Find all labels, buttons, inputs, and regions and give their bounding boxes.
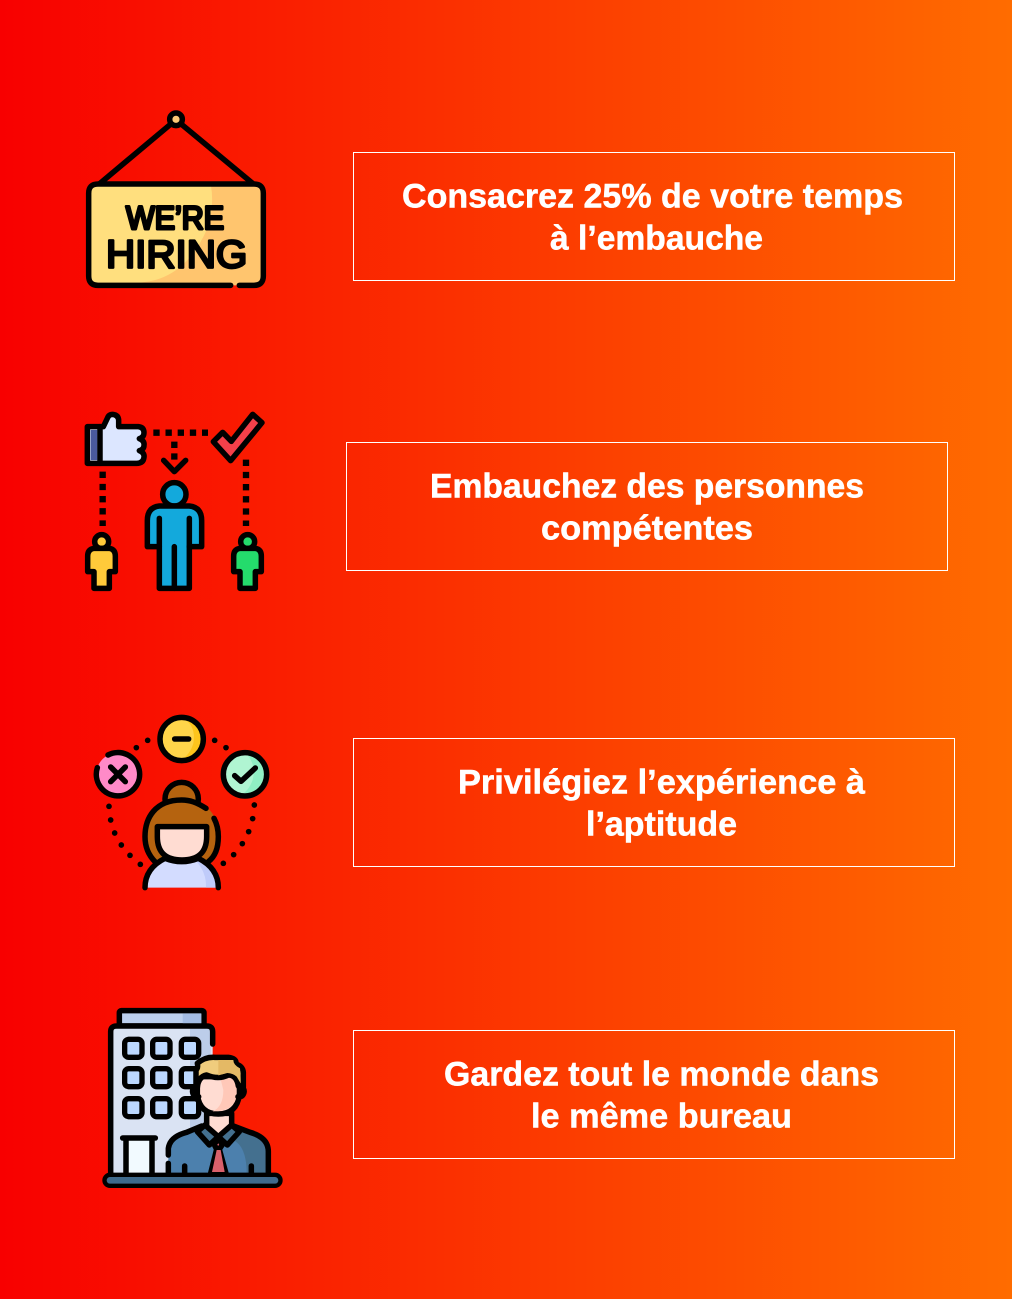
icon: woman weighing options — [96, 717, 267, 888]
panel: hiring time: à l’embauche — [550, 220, 763, 258]
neutral circle — [160, 717, 203, 761]
panel: competent people: compétentes — [541, 510, 753, 548]
woman — [145, 782, 218, 888]
man — [168, 1057, 268, 1173]
panel: same office — [354, 1030, 954, 1158]
green person — [234, 535, 261, 588]
panel: experience over aptitude — [354, 738, 954, 866]
panel: hiring time — [354, 152, 954, 280]
negative circle — [96, 753, 140, 796]
check mark — [213, 414, 262, 461]
panel: competent people — [346, 442, 948, 570]
icon: we're hiring sign: WE’RE — [126, 200, 224, 236]
panel: experience over aptitude: Privilégiez l’expérience à — [458, 764, 866, 802]
building — [111, 1011, 213, 1173]
thumbs up — [87, 414, 144, 463]
positive circle — [223, 753, 267, 796]
icon: skills selection people — [87, 414, 262, 588]
panel: competent people: Embauchez des personnes — [430, 468, 864, 506]
icon: we're hiring sign — [89, 113, 263, 285]
desk bar — [110, 1157, 275, 1203]
icon: we're hiring sign: HIRING — [106, 232, 247, 276]
dotted connectors — [103, 433, 246, 526]
panel: same office: Gardez tout le monde dans — [444, 1056, 879, 1094]
yellow person — [88, 535, 115, 588]
panel: hiring time: Consacrez 25% de votre temps — [402, 178, 903, 216]
dotted arc — [106, 737, 257, 867]
panel: experience over aptitude: l’aptitude — [586, 806, 737, 844]
icon: office building and employee — [110, 1011, 275, 1180]
central person — [147, 483, 202, 588]
panel: same office: le même bureau — [531, 1098, 792, 1136]
